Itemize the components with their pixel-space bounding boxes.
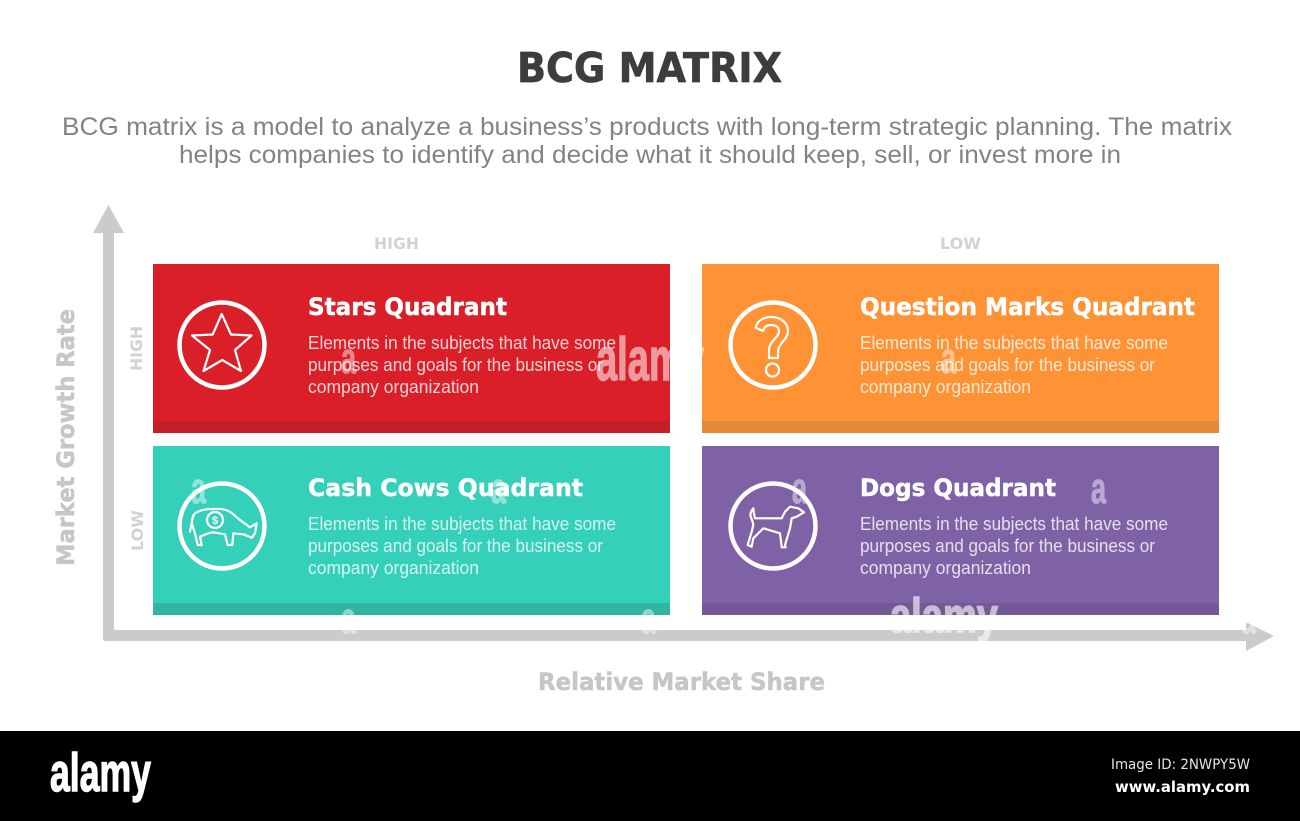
text block: cash cows description — [308, 514, 616, 578]
title: BCG MATRIX — [517, 44, 782, 92]
heading: stars quadrant: Stars Quadrant — [308, 293, 507, 321]
row label: high: HIGH — [127, 326, 146, 371]
panel: question marks quadrant — [702, 264, 1219, 433]
row label: low: LOW — [128, 510, 147, 551]
text block: question marks description — [860, 333, 1168, 397]
icon: dog — [730, 484, 816, 568]
text block: question marks description: company organization — [860, 377, 1031, 397]
footer image id: Image ID: 2NWPY5W — [1111, 757, 1250, 773]
heading: cash cows quadrant: Cash Cows Quadrant — [308, 474, 583, 502]
text block: stars description: company organization — [308, 377, 479, 397]
icon: star — [180, 302, 264, 388]
panel: dogs quadrant — [702, 446, 1219, 615]
arrow: vertical axis — [93, 205, 124, 641]
x axis title: Relative Market Share — [538, 668, 825, 696]
icon: cow with coin — [180, 484, 264, 568]
text block: dogs description: Elements in the subjects that have some — [860, 514, 1168, 534]
text block: stars description: Elements in the subjects that have some — [308, 333, 616, 353]
text block: question marks description: Elements in the subjects that have some — [860, 333, 1168, 353]
footer website: www.alamy.com — [1115, 778, 1250, 796]
panel: stars quadrant — [153, 264, 670, 433]
heading: question marks quadrant: Question Marks Quadrant — [860, 293, 1195, 321]
footer bar — [0, 731, 1300, 821]
watermark: stock photo marks: a — [491, 464, 506, 513]
watermark: stock photo marks: a — [1091, 464, 1106, 513]
text block: stars description: purposes and goals for the business or — [308, 355, 603, 375]
footer logo: alamy — [50, 743, 151, 803]
watermark: stock photo marks: a — [941, 334, 956, 383]
watermark: stock photo marks: a — [1241, 594, 1256, 643]
watermark: stock photo marks: a — [341, 594, 356, 643]
watermark: stock photo marks: a — [341, 334, 356, 383]
text block: dogs description: company organization — [860, 558, 1031, 578]
subtitle text — [62, 113, 1233, 169]
text block: dogs description — [860, 514, 1168, 578]
watermark: stock photo marks: a — [641, 594, 656, 643]
panel: cash cows quadrant — [153, 446, 670, 615]
icon: cow with coin: $ — [212, 515, 218, 527]
icon: question mark — [730, 302, 816, 388]
y axis title: Market Growth Rate — [52, 309, 80, 566]
subtitle text: BCG matrix is a model to analyze a business’s products with long-term strategic planning. The matrix — [62, 113, 1233, 141]
watermark: stock photo marks — [191, 326, 1256, 643]
text block: question marks description: purposes and goals for the business or — [860, 355, 1155, 375]
text block: cash cows description: Elements in the subjects that have some — [308, 514, 616, 534]
column label: low: LOW — [940, 234, 981, 253]
watermark: stock photo marks: a — [191, 464, 206, 513]
watermark: stock photo marks: alamy — [890, 590, 998, 643]
watermark: stock photo marks: alamy — [596, 326, 704, 393]
arrow: horizontal axis — [103, 622, 1274, 651]
heading: dogs quadrant: Dogs Quadrant — [860, 474, 1056, 502]
text block: cash cows description: purposes and goals for the business or — [308, 536, 603, 556]
text block: stars description — [308, 333, 616, 397]
watermark: stock photo marks: a — [792, 464, 807, 513]
column label: high: HIGH — [374, 234, 419, 253]
text block: cash cows description: company organization — [308, 558, 479, 578]
text block: dogs description: purposes and goals for the business or — [860, 536, 1155, 556]
subtitle text: helps companies to identify and decide what it should keep, sell, or invest more in — [179, 141, 1121, 169]
